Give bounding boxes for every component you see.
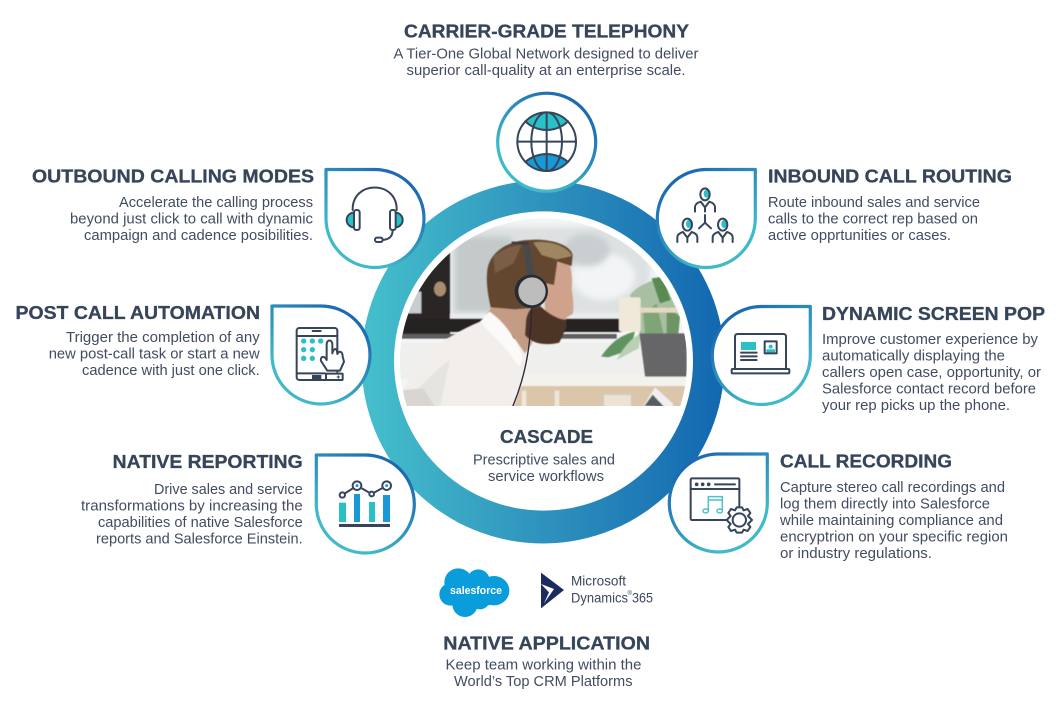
heading: OUTBOUND CALLING MODES (32, 166, 314, 186)
description: A Tier-One Global Network designed to deliver (394, 46, 699, 62)
heading: DYNAMIC SCREEN POP (822, 303, 1045, 324)
description: Prescriptive sales and (473, 453, 615, 469)
description: new post-call task or start a new (49, 346, 260, 362)
badge (712, 306, 810, 404)
photo: man wearing headphones at a desk (400, 218, 687, 406)
description: Route inbound sales and service (768, 195, 980, 211)
panel: dynamic screen pop (712, 303, 1045, 414)
icon: bar and line chart (339, 481, 391, 527)
badge: globe (498, 93, 596, 191)
description: cadence with just one click. (82, 363, 260, 379)
description (473, 453, 615, 485)
panel: inbound call routing (657, 166, 1012, 267)
icon: globe (517, 112, 576, 171)
heading: NATIVE REPORTING (113, 451, 303, 472)
panel: native reporting (81, 451, 414, 553)
description: capabilities of native Salesforce (98, 515, 303, 531)
description: callers open case, opportunity, or (822, 365, 1041, 381)
badge (657, 170, 755, 267)
description: Improve customer experience by (822, 332, 1039, 348)
description: log them directly into Salesforce (780, 496, 990, 512)
description: reports and Salesforce Einstein. (96, 532, 303, 548)
heading: NATIVE APPLICATION (443, 632, 650, 654)
description (768, 195, 980, 244)
logo: salesforce: salesforce (450, 585, 502, 597)
description (70, 195, 314, 244)
description: Trigger the completion of any (66, 330, 260, 346)
icon: headset (347, 187, 403, 242)
description: transformations by increasing the (81, 498, 303, 514)
description: service workflows (488, 469, 604, 485)
heading: CASCADE (500, 426, 593, 447)
logo: salesforce (439, 568, 509, 617)
heading: POST CALL AUTOMATION (16, 302, 260, 323)
description (49, 330, 260, 379)
badge (326, 170, 424, 268)
icon: laptop with contact record (732, 334, 789, 373)
icon: team hierarchy (677, 188, 733, 242)
description: Drive sales and service (154, 482, 303, 498)
panel: call recording (669, 451, 1008, 562)
logo: microsoft dynamics 365: Dynamics (571, 589, 628, 605)
description: Accelerate the calling process (119, 195, 313, 211)
description: beyond just click to call with dynamic (70, 212, 314, 228)
badge (272, 306, 370, 404)
description: active opprtunities or cases. (768, 228, 951, 244)
description: superior call-quality at an enterprise scale. (406, 63, 686, 79)
badge (316, 455, 414, 553)
logo: microsoft dynamics 365: 365 (632, 589, 653, 605)
central ring (362, 180, 724, 544)
description (446, 658, 642, 690)
description: encryptrion on your specific region (780, 530, 1008, 546)
panel: carrier-grade telephony (394, 20, 699, 191)
description: Keep team working within the (446, 658, 642, 674)
icon: audio window with gear (691, 478, 752, 533)
heading: CARRIER-GRADE TELEPHONY (404, 20, 690, 42)
description (81, 482, 303, 548)
logo: microsoft dynamics 365 (541, 572, 653, 608)
description (394, 46, 699, 79)
heading: INBOUND CALL ROUTING (768, 166, 1012, 186)
panel: cascade centre text (473, 426, 615, 485)
description: campaign and cadence posibilities. (84, 228, 313, 244)
description: World’s Top CRM Platforms (454, 674, 632, 690)
description: automatically displaying the (822, 348, 1005, 364)
description: Capture stereo call recordings and (780, 480, 1005, 496)
icon: tablet with touch keypad (297, 328, 344, 380)
panel: native application (443, 632, 650, 690)
panel: post call automation (16, 302, 370, 404)
logo: microsoft dynamics 365: Microsoft (571, 572, 626, 588)
description: while maintaining compliance and (779, 513, 1003, 529)
logo: microsoft dynamics 365: ® (628, 590, 632, 597)
description: calls to the correct rep based on (768, 212, 978, 228)
description: Salesforce contact record before (822, 382, 1036, 398)
badge (669, 454, 767, 552)
description: or industry regulations. (780, 546, 932, 562)
description (779, 480, 1008, 562)
panel: outbound calling modes (32, 166, 424, 268)
description: your rep picks up the phone. (822, 398, 1010, 414)
description (822, 332, 1041, 414)
heading: CALL RECORDING (780, 451, 952, 472)
